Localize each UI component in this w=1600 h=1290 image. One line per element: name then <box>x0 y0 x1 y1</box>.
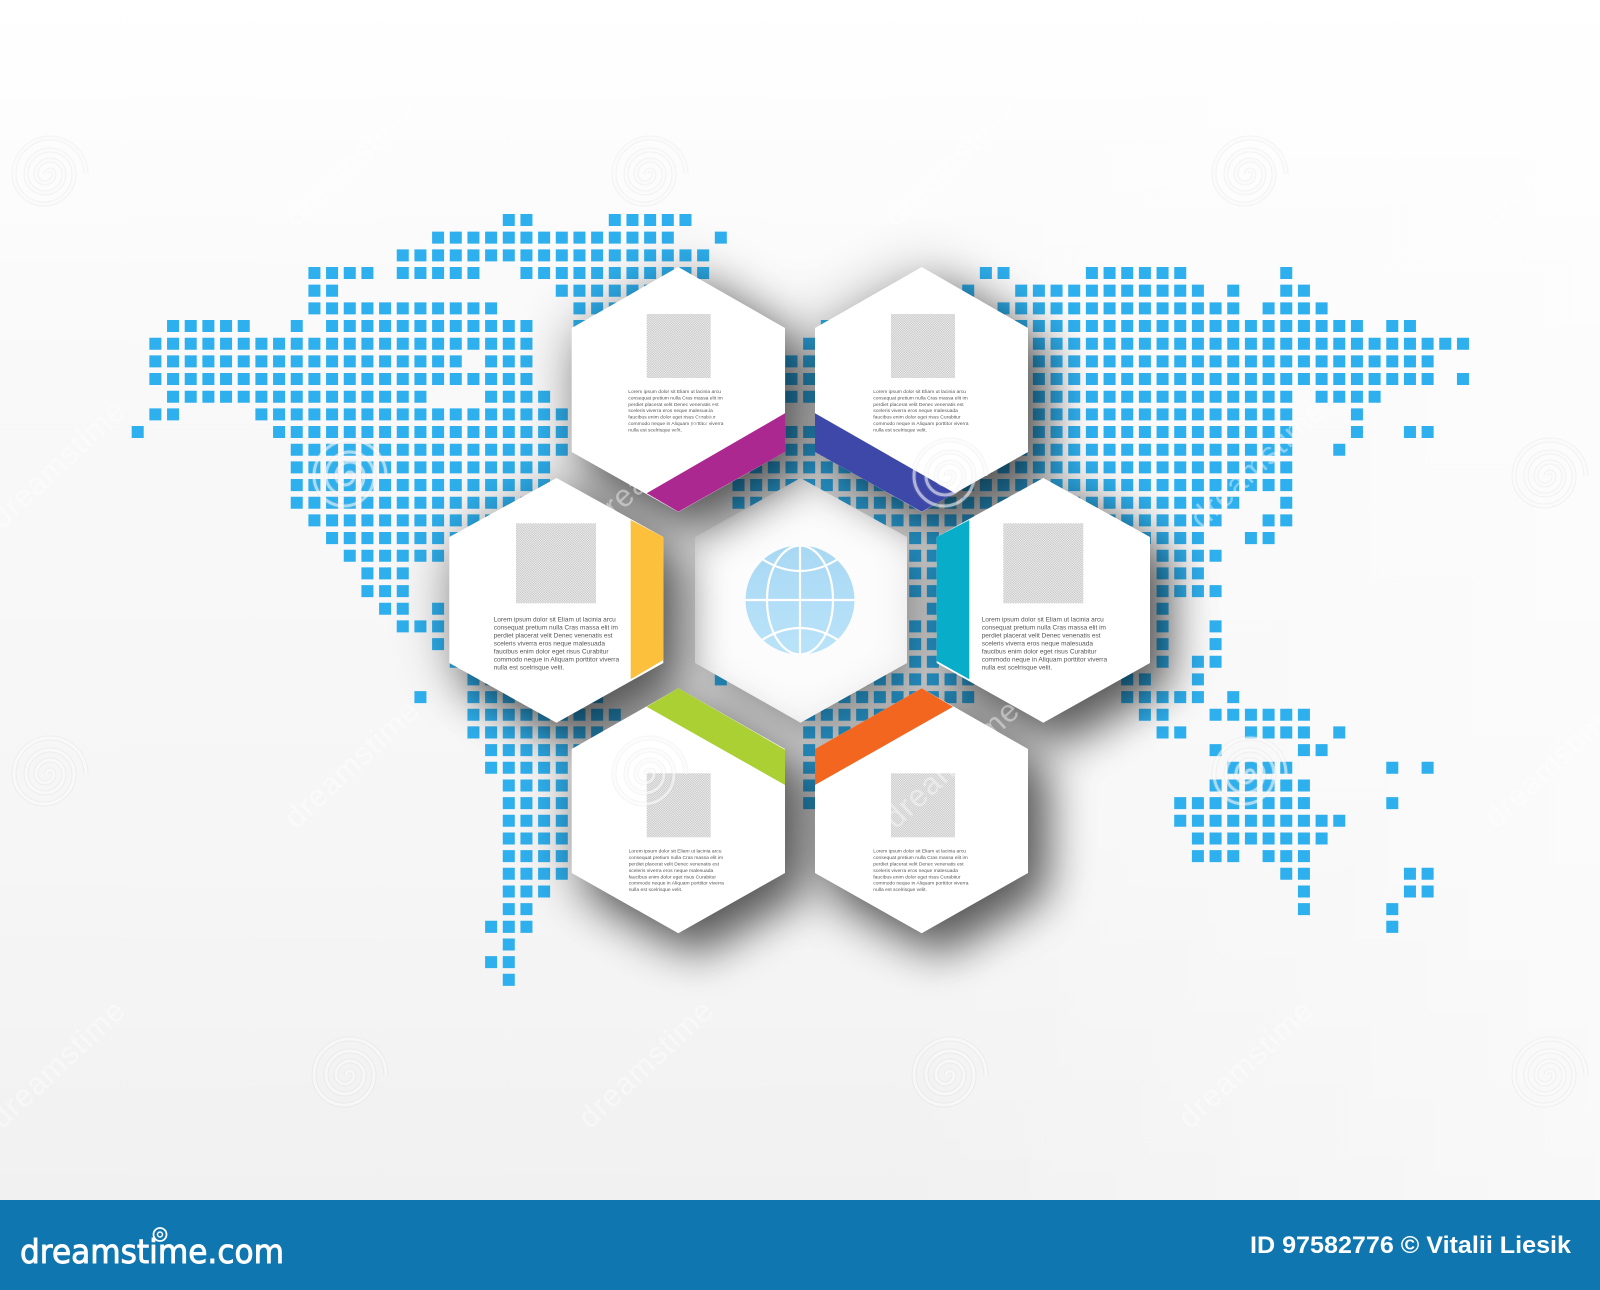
text block: Lorem ipsum dolor sit Eliam ut lacinia arcu <box>982 616 1104 624</box>
text block: Lorem ipsum dolor sit Eliam ut lacinia arcu <box>629 849 722 855</box>
panel: bottom-right hexagon <box>815 688 1028 933</box>
text block: commodo neque in Aliquam porttitor viverra <box>628 421 724 427</box>
footer logo: dreamstime.com <box>20 1232 284 1271</box>
icon: globe <box>746 546 854 654</box>
footer credit: ID 97582776 © Vitalii Liesik <box>1250 1232 1572 1259</box>
shadow: center hexagon <box>707 494 919 739</box>
panel: right hexagon <box>937 478 1150 723</box>
text block: sceleris viverra eros neque malesuada <box>629 868 713 874</box>
watermark: text: dreamstime <box>1183 392 1333 535</box>
text block: perdiet placerat velit Denec venenatis est <box>628 402 719 408</box>
text block: commodo neque in Aliquam porttitor viverra <box>873 881 969 887</box>
text block: perdiet placerat velit Denec venenatis est <box>494 632 613 640</box>
text block: perdiet placerat velit Denec venenatis est <box>873 862 964 868</box>
text block: nulla est scelrisque velit. <box>494 664 564 672</box>
purple band <box>647 413 785 512</box>
wide shadows: outer hexagons <box>449 271 1150 937</box>
teal band <box>937 520 969 679</box>
text block: perdiet placerat velit Denec venenatis est <box>629 862 720 868</box>
watermark: text: dreamstime <box>571 992 721 1135</box>
image placeholder <box>891 773 955 837</box>
text block: consequat pretium nulla Cras massa elit im <box>494 624 618 632</box>
image placeholder <box>647 314 711 378</box>
text block: commodo neque in Aliquam porttitor viverra <box>629 881 724 887</box>
green band <box>647 688 785 785</box>
watermark: text: dreamstime <box>877 692 1027 835</box>
watermark: spirals <box>14 138 1586 1105</box>
text block: consequat pretium nulla Cras massa elit im <box>628 395 723 401</box>
text block: nulla est scelrisque velit. <box>629 887 682 893</box>
text block: consequat pretium nulla Cras massa elit im <box>873 395 968 401</box>
image placeholder <box>1003 523 1083 603</box>
text block: Lorem ipsum dolor sit Eliam ut lacinia arcu <box>873 389 966 395</box>
blue band <box>815 413 955 512</box>
text block: sceleris viverra eros neque malesuada <box>982 640 1093 648</box>
text block: nulla est scelrisque velit. <box>982 664 1052 672</box>
image placeholder <box>647 773 711 837</box>
text block: sceleris viverra eros neque malesuada <box>494 640 605 648</box>
watermark: text: dreamstime <box>583 392 733 535</box>
watermark: text: dreamstime <box>1171 992 1321 1135</box>
text block: commodo neque in Aliquam porttitor viverra <box>873 421 969 427</box>
center hexagon with globe <box>695 478 907 723</box>
image placeholder <box>516 523 596 603</box>
text block: Lorem ipsum dolor sit Eliam ut lacinia arcu <box>628 389 721 395</box>
panel: left hexagon <box>449 478 663 723</box>
text block: perdiet placerat velit Denec venenatis est <box>873 402 964 408</box>
panel: top-right hexagon <box>815 267 1028 512</box>
text block: sceleris viverra eros neque malesuada <box>873 408 958 414</box>
shadows: outer hexagons <box>469 289 1170 955</box>
panel: bottom-left hexagon <box>572 688 785 933</box>
watermark: text: dreamstime <box>277 692 427 835</box>
footer bar <box>0 1200 1600 1290</box>
text block: sceleris viverra eros neque malesuada <box>628 408 713 414</box>
text block: consequat pretium nulla Cras massa elit im <box>629 855 723 861</box>
text block: nulla est scelrisque velit. <box>628 427 682 433</box>
dotted world map <box>132 220 1469 980</box>
text block: commodo neque in Aliquam porttitor viverra <box>982 656 1107 664</box>
text block: perdiet placerat velit Denec venenatis est <box>982 632 1101 640</box>
text block: consequat pretium nulla Cras massa elit im <box>982 624 1106 632</box>
watermark: text: dreamstime <box>277 90 427 233</box>
text block: faucibus enim dolor eget risus Curabitur <box>629 874 716 880</box>
text block: Lorem ipsum dolor sit Eliam ut lacinia arcu <box>873 849 966 855</box>
text block: faucibus enim dolor eget risus Curabitur <box>873 415 961 421</box>
panel: top-left hexagon <box>572 267 785 512</box>
text block: faucibus enim dolor eget risus Curabitur <box>494 648 609 656</box>
text block: commodo neque in Aliquam porttitor viverra <box>494 656 619 664</box>
yellow band <box>631 520 663 679</box>
text block: sceleris viverra eros neque malesuada <box>873 868 958 874</box>
text block: Lorem ipsum dolor sit Eliam ut lacinia arcu <box>494 616 616 624</box>
text block: faucibus enim dolor eget risus Curabitur <box>628 415 716 421</box>
orange band <box>815 688 953 785</box>
text block: nulla est scelrisque velit. <box>873 427 927 433</box>
text block: nulla est scelrisque velit. <box>873 887 927 893</box>
text block: faucibus enim dolor eget risus Curabitur <box>873 874 961 880</box>
text block: consequat pretium nulla Cras massa elit im <box>873 855 968 861</box>
image placeholder <box>891 314 955 378</box>
watermark: text: dreamstime <box>877 90 1027 233</box>
text block: faucibus enim dolor eget risus Curabitur <box>982 648 1097 656</box>
